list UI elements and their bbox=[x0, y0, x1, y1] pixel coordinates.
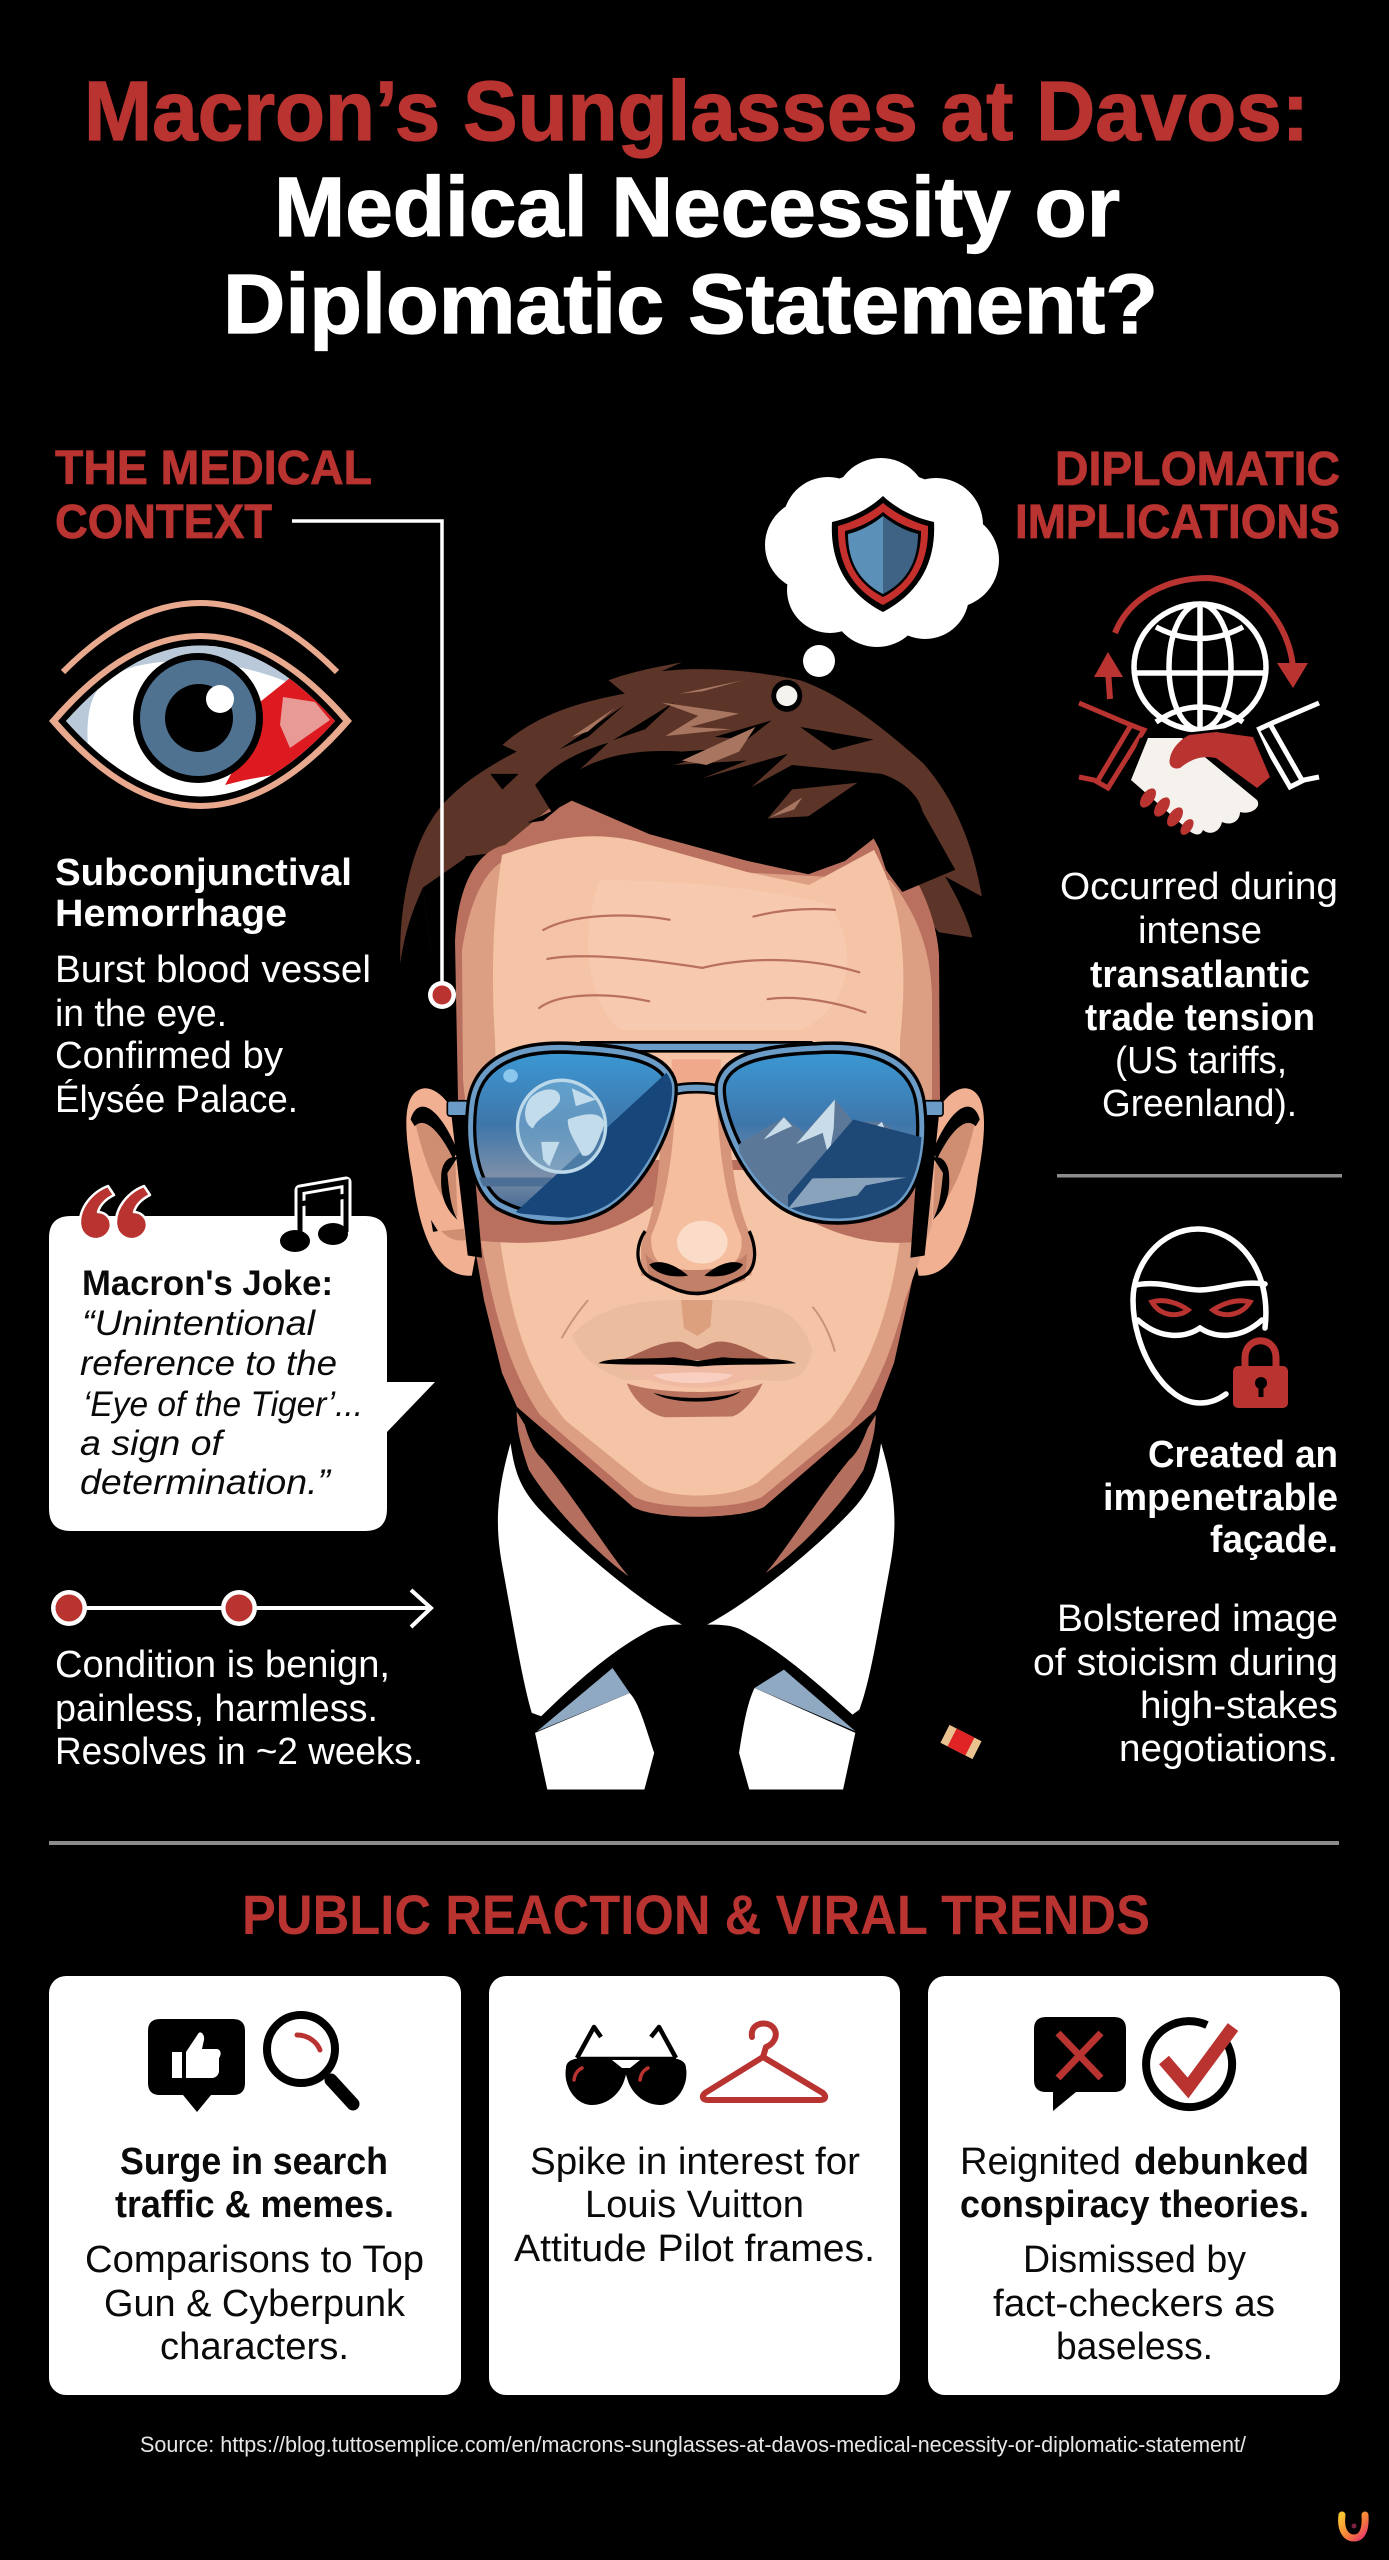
hair front bbox=[423, 680, 955, 950]
face bbox=[455, 790, 940, 1517]
icon: aviator sunglasses bbox=[566, 2027, 686, 2105]
text: subconjunctival hemorrhage: in the eye. bbox=[55, 993, 227, 1035]
text: impenetrable facade: negotiations. bbox=[1119, 1728, 1338, 1770]
joke text: a sign of bbox=[80, 1424, 226, 1463]
panel: search traffic card bbox=[49, 1976, 461, 2395]
card text: Attitude Pilot frames. bbox=[514, 2228, 875, 2270]
medical context heading bbox=[55, 442, 372, 549]
title: Macron’s Sunglasses at Davos: bbox=[84, 64, 1309, 158]
section heading: public reaction: PUBLIC REACTION & VIRAL TRENDS bbox=[242, 1883, 1150, 1946]
icon: hanger bbox=[703, 2024, 825, 2100]
text: transatlantic trade tension: trade tension bbox=[1085, 997, 1315, 1039]
card text: Reignited bbox=[960, 2141, 1121, 2183]
text: subconjunctival hemorrhage: Élysée Palace. bbox=[55, 1078, 298, 1121]
lens reflection: globe bbox=[479, 1069, 672, 1218]
ears bbox=[406, 1088, 984, 1276]
card text bbox=[514, 2141, 875, 2270]
text: impenetrable facade: impenetrable bbox=[1103, 1477, 1338, 1519]
joke text bbox=[80, 1264, 363, 1502]
card text: fact-checkers as bbox=[993, 2283, 1275, 2325]
card text: conspiracy theories. bbox=[960, 2184, 1309, 2226]
text: impenetrable facade: Bolstered image bbox=[1057, 1598, 1338, 1640]
source line: Source: https://blog.tuttosemplice.com/en/macrons-sunglasses-at-davos-medical-necessity-or-diplomatic-statement/ bbox=[140, 2432, 1247, 2457]
card text: Gun & Cyberpunk bbox=[104, 2283, 406, 2325]
text: condition benign bbox=[55, 1644, 423, 1773]
text: subconjunctival hemorrhage: Subconjunctival bbox=[55, 852, 352, 894]
under-glasses shadow bbox=[472, 1160, 925, 1243]
joke text: ‘Eye of the Tiger’... bbox=[83, 1385, 363, 1424]
text: transatlantic trade tension bbox=[1060, 866, 1338, 1125]
joke text: “Unintentional bbox=[82, 1304, 316, 1343]
red circular arrows bbox=[1094, 578, 1308, 699]
joke text: determination.” bbox=[80, 1463, 331, 1502]
text: impenetrable facade: façade. bbox=[1210, 1519, 1338, 1561]
right collar bbox=[707, 1443, 894, 1715]
text: transatlantic trade tension: Occurred during bbox=[1060, 866, 1338, 908]
diplomatic implications heading bbox=[1015, 443, 1340, 549]
icon: check mark bbox=[1146, 2021, 1233, 2107]
card text: debunked bbox=[1134, 2141, 1309, 2183]
icon: red eye bbox=[49, 603, 352, 809]
card text bbox=[85, 2141, 424, 2368]
text: subconjunctival hemorrhage bbox=[55, 852, 371, 1121]
joke text: Macron's Joke: bbox=[82, 1264, 333, 1303]
text: transatlantic trade tension: intense bbox=[1138, 910, 1262, 952]
hair back bbox=[400, 662, 982, 963]
icon: shield bbox=[832, 496, 934, 612]
card text: baseless. bbox=[1056, 2326, 1213, 2368]
icon: music note bbox=[280, 1182, 348, 1252]
card text: Spike in interest for bbox=[530, 2141, 860, 2183]
card text: Comparisons to Top bbox=[85, 2239, 424, 2281]
connector line to forehead bbox=[292, 521, 456, 1009]
lips bbox=[562, 1300, 835, 1417]
text: transatlantic trade tension: Greenland). bbox=[1102, 1083, 1297, 1125]
joke text: reference to the bbox=[80, 1344, 337, 1383]
card text: Dismissed by bbox=[1023, 2239, 1246, 2281]
icon: thumbs up bbox=[148, 2019, 245, 2112]
thought dot in hair bbox=[771, 680, 802, 712]
nose bbox=[638, 1093, 755, 1296]
handshake bbox=[1079, 703, 1144, 788]
title bbox=[84, 64, 1309, 351]
timeline arrow bbox=[51, 1590, 431, 1627]
lens reflection: mountains bbox=[739, 1099, 923, 1222]
icon: X speech bubble bbox=[1034, 2017, 1126, 2111]
text: transatlantic trade tension: transatlantic bbox=[1090, 954, 1310, 996]
card text: Louis Vuitton bbox=[585, 2184, 804, 2226]
icon: masked face with padlock bbox=[1133, 1229, 1288, 1408]
forehead wrinkles bbox=[539, 909, 866, 1012]
panel: macron's joke speech bubble bbox=[49, 1182, 435, 1531]
sunglasses bbox=[447, 1047, 943, 1258]
text: condition benign: painless, harmless. bbox=[55, 1688, 378, 1730]
thought bubble with shield bbox=[765, 458, 999, 677]
left collar bbox=[498, 1443, 682, 1716]
mouth area shading bbox=[572, 1300, 812, 1381]
globe bbox=[1134, 604, 1266, 730]
shirt bbox=[535, 1693, 654, 1790]
icon: magnifier bbox=[267, 2015, 353, 2104]
text: impenetrable facade bbox=[1033, 1434, 1338, 1770]
card text: Surge in search bbox=[120, 2141, 388, 2183]
neck and collar bbox=[498, 1412, 894, 1790]
text: impenetrable facade: Created an bbox=[1148, 1434, 1338, 1476]
panel: conspiracy theories card bbox=[928, 1976, 1340, 2395]
diplomatic implications heading: DIPLOMATIC bbox=[1055, 443, 1340, 496]
portrait: man in sunglasses bbox=[400, 662, 984, 1790]
medical context heading: THE MEDICAL bbox=[55, 442, 372, 495]
text: impenetrable facade: high-stakes bbox=[1140, 1685, 1338, 1727]
text: condition benign: Resolves in ~2 weeks. bbox=[55, 1731, 423, 1773]
card text: characters. bbox=[160, 2326, 349, 2368]
text: condition benign: Condition is benign, bbox=[55, 1644, 390, 1686]
medical context heading: CONTEXT bbox=[55, 496, 272, 549]
lapel pin bbox=[940, 1725, 982, 1759]
title: Medical Necessity or bbox=[274, 160, 1120, 254]
text: subconjunctival hemorrhage: Burst blood vessel bbox=[55, 949, 371, 991]
diplomatic implications heading: IMPLICATIONS bbox=[1015, 496, 1340, 549]
text: transatlantic trade tension: (US tariffs, bbox=[1115, 1040, 1287, 1082]
icon: globe and handshake bbox=[1079, 578, 1319, 845]
text: subconjunctival hemorrhage: Confirmed by bbox=[55, 1035, 283, 1077]
title: Diplomatic Statement? bbox=[223, 257, 1158, 351]
icon: quotation marks bbox=[80, 1186, 150, 1239]
panel: louis vuitton card bbox=[489, 1976, 900, 2395]
text: impenetrable facade: of stoicism during bbox=[1033, 1642, 1338, 1684]
text: subconjunctival hemorrhage: Hemorrhage bbox=[55, 893, 287, 935]
logo mark bbox=[1342, 2515, 1365, 2538]
card text bbox=[960, 2141, 1309, 2368]
card text: traffic & memes. bbox=[115, 2184, 394, 2226]
